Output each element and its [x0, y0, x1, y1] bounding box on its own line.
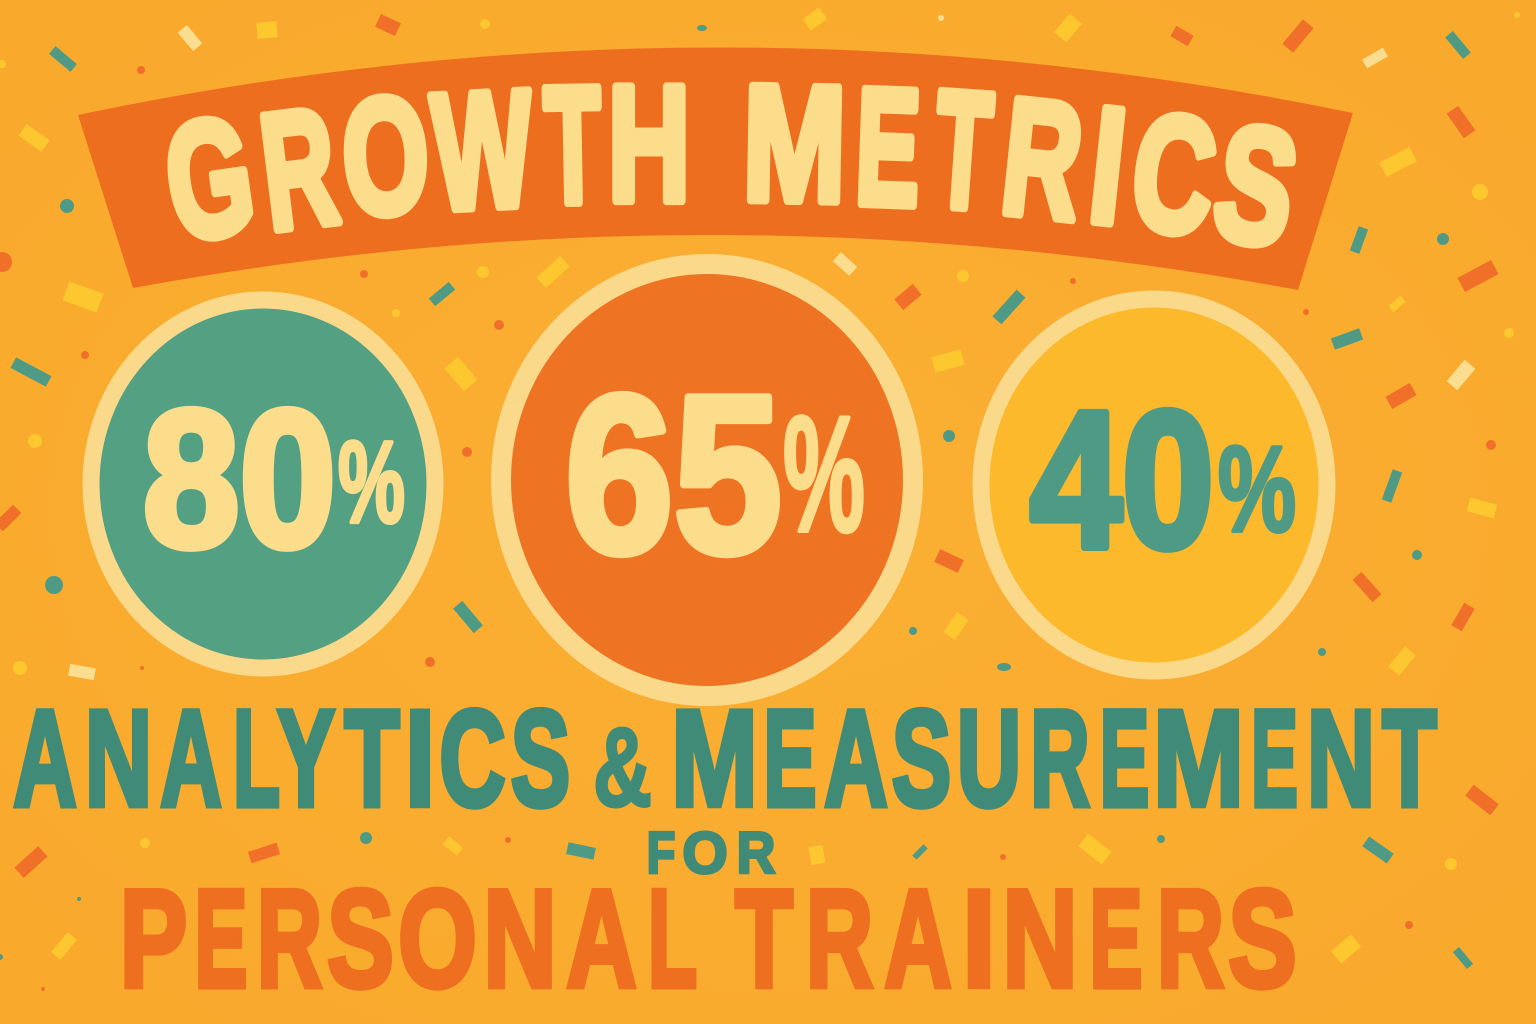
title: I — [1082, 73, 1134, 259]
heading: analytics and measurement: & — [593, 705, 652, 830]
heading: analytics and measurement: U — [957, 682, 1021, 835]
heading: personal trainers: L — [648, 862, 697, 1017]
title: O — [338, 62, 433, 250]
stat circle: 80%: 80 — [143, 370, 336, 588]
heading: analytics and measurement: S — [892, 682, 951, 835]
title: C — [1123, 77, 1226, 270]
heading: analytics and measurement: A — [160, 683, 222, 836]
heading: analytics and measurement — [13, 681, 1437, 836]
title: M — [741, 50, 848, 236]
heading: analytics and measurement: N — [85, 682, 152, 835]
heading: analytics and measurement: L — [233, 681, 280, 835]
title: R — [994, 64, 1091, 255]
heading: analytics and measurement: E — [1251, 683, 1298, 836]
heading: analytics and measurement: T — [1382, 682, 1437, 835]
title: T — [543, 53, 602, 238]
heading: personal trainers — [120, 860, 1297, 1017]
stat circle: 65% — [501, 264, 913, 696]
heading: personal trainers: O — [398, 861, 477, 1016]
heading: for: O — [682, 821, 728, 886]
heading: personal trainers: A — [566, 861, 637, 1017]
heading: for — [647, 821, 775, 886]
heading: analytics and measurement: M — [671, 682, 758, 835]
heading: personal trainers: S — [327, 860, 394, 1016]
heading: personal trainers: S — [1228, 860, 1297, 1016]
heading: personal trainers: P — [120, 861, 187, 1016]
title: G — [155, 81, 264, 276]
stat circle: 65%: % — [783, 382, 865, 566]
heading: analytics and measurement: T — [344, 682, 400, 835]
title: T — [929, 57, 997, 245]
heading: personal trainers: E — [195, 861, 247, 1016]
heading: for: F — [647, 821, 675, 886]
heading: personal trainers: T — [735, 861, 793, 1017]
title: H — [608, 53, 690, 237]
stat circle: 65%: 65 — [565, 348, 782, 600]
heading: personal trainers: R — [806, 862, 873, 1017]
stat circle: 40% — [981, 299, 1327, 671]
title: W — [428, 57, 537, 245]
heading: personal trainers: E — [1090, 861, 1142, 1016]
banner: growth metrics — [78, 47, 1353, 290]
stat circle: 80%: % — [338, 417, 405, 547]
heading: for: R — [737, 821, 775, 885]
heading: personal trainers: N — [483, 861, 557, 1016]
heading: analytics and measurement: Y — [277, 682, 335, 835]
heading: personal trainers: I — [962, 861, 996, 1016]
stat circle: 40%: 40 — [1030, 371, 1214, 589]
heading: analytics and measurement: E — [1100, 682, 1149, 835]
heading: analytics and measurement: S — [511, 682, 570, 835]
stat circle: 80% — [91, 300, 435, 668]
heading: analytics and measurement: C — [439, 681, 506, 835]
stat circle: 40%: % — [1218, 421, 1296, 557]
heading: analytics and measurement: E — [764, 682, 816, 835]
heading: analytics and measurement: A — [824, 683, 888, 835]
title: E — [853, 54, 923, 241]
heading: analytics and measurement: R — [1030, 682, 1090, 835]
title — [155, 50, 1310, 284]
heading: analytics and measurement: N — [1307, 681, 1375, 835]
heading: personal trainers: A — [884, 862, 952, 1017]
title: S — [1202, 89, 1310, 284]
heading: personal trainers: R — [1157, 862, 1224, 1017]
heading: personal trainers: R — [257, 861, 322, 1016]
title: R — [252, 73, 346, 265]
heading: analytics and measurement: A — [13, 683, 77, 835]
heading: analytics and measurement: M — [1153, 683, 1244, 835]
heading: analytics and measurement: I — [405, 682, 435, 835]
heading: personal trainers: N — [1002, 862, 1078, 1017]
